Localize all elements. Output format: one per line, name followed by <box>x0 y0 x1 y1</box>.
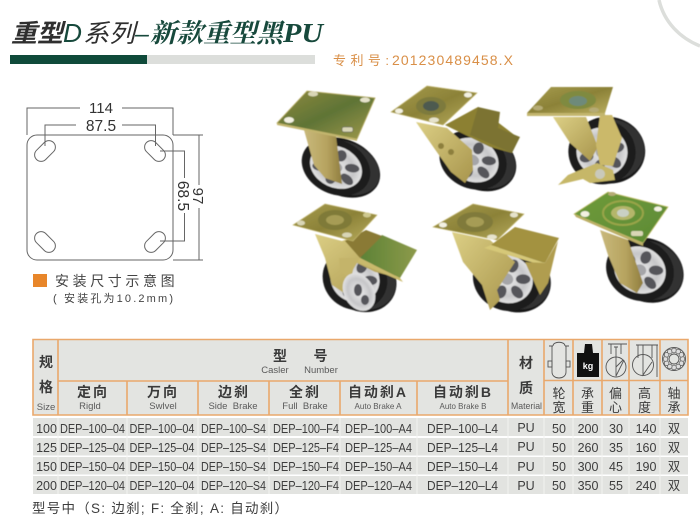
table row: 100: 30 <box>609 422 623 436</box>
header: material <box>511 355 542 412</box>
table row: 200: PU <box>517 479 535 493</box>
table row: 100: 50 <box>552 422 566 436</box>
mounting plate outline <box>27 135 173 260</box>
dimension 114: 114 <box>89 100 113 117</box>
title <box>11 18 325 48</box>
hole size note: ( 安装孔为10.2mm) <box>53 291 173 305</box>
table row: 100 <box>36 421 681 436</box>
table row: 200: DEP–120–S4 <box>201 479 266 493</box>
caster: full brake <box>293 204 417 326</box>
caster: auto brake <box>433 204 562 326</box>
header: auto brake A <box>348 384 408 411</box>
table row: 125: DEP–125–A4 <box>345 441 412 455</box>
table row: 150: DEP–150–L4 <box>427 460 498 474</box>
header: offset label: 偏 <box>609 386 622 401</box>
table row: 125: DEP–125–04 <box>130 441 195 455</box>
legend caption: 安装尺寸示意图 <box>55 273 178 289</box>
table row: 200 <box>36 479 681 493</box>
header: bearing label: 轴 <box>667 386 681 401</box>
header: full brake: Full Brake <box>282 401 328 412</box>
table row: 200: DEP–120–F4 <box>273 479 339 493</box>
header: offset label: 心 <box>609 400 622 415</box>
header: height label: 高 <box>638 386 651 401</box>
header: auto brake B: Auto Brake B <box>440 401 487 411</box>
icon: wheel width <box>548 342 570 378</box>
header: height label <box>638 386 651 415</box>
table row: 100: 140 <box>636 422 656 436</box>
icon: bearing <box>662 348 686 370</box>
header: rigid: Rigld <box>79 401 101 412</box>
table row: 125: 50 <box>552 441 566 455</box>
table row: 100: DEP–100–F4 <box>273 422 339 436</box>
icon: load weight <box>577 344 599 377</box>
patent number: 专利号: <box>333 53 389 68</box>
table row: 125: PU <box>517 440 535 454</box>
title progress bar <box>10 55 315 64</box>
header: swivel <box>147 384 179 412</box>
header: swivel: Swlvel <box>149 401 177 412</box>
header: material: 材 <box>519 355 533 371</box>
header: load label: 重 <box>581 400 594 415</box>
table row: 150: 150 <box>36 460 57 474</box>
caster: swivel with brake <box>391 86 526 204</box>
table row: 100: DEP–100–A4 <box>345 422 412 436</box>
header: bearing label: 承 <box>667 400 681 415</box>
table row: 150: DEP–150–F4 <box>273 460 339 474</box>
icon: offset <box>606 344 627 377</box>
table row: 200: DEP–120–L4 <box>427 479 498 493</box>
table row: 150: DEP–150–04 <box>60 460 125 474</box>
table row: 150 <box>36 460 681 474</box>
header: material: 质 <box>519 380 533 396</box>
table row: 100: DEP–100–04 <box>60 422 125 436</box>
table row: 150: 190 <box>636 460 656 474</box>
header: full brake <box>282 384 328 412</box>
header: model number: Casler <box>261 365 289 376</box>
icon: height <box>632 345 658 377</box>
caster photos <box>277 86 694 326</box>
table row: 150: DEP–150–A4 <box>345 460 412 474</box>
table row: 200: 55 <box>609 479 623 493</box>
table row: 125: 双 <box>668 441 681 455</box>
header: rigid <box>77 384 109 412</box>
table row: 150: 45 <box>609 460 623 474</box>
header: model number: 型 <box>273 348 287 364</box>
table row: 125: 125 <box>36 441 57 455</box>
table row: 125 <box>36 440 681 455</box>
header: wheel width label <box>552 386 566 415</box>
table row: 150: DEP–150–S4 <box>201 460 266 474</box>
decorative corner arc <box>659 0 700 46</box>
header: size: 格 <box>39 379 53 395</box>
title: 系列 <box>83 20 139 48</box>
table row: 150: PU <box>517 460 535 474</box>
table row: 125: DEP–125–L4 <box>427 441 498 455</box>
table row: 200: DEP–120–04 <box>130 479 195 493</box>
table row: 200: 350 <box>578 479 598 493</box>
legend swatch <box>33 274 47 287</box>
header: wheel width label: 轮 <box>552 386 566 401</box>
table row: 125: 160 <box>636 441 656 455</box>
header: auto brake A: 自动刹A <box>348 384 408 400</box>
table row: 100: 200 <box>578 422 598 436</box>
table row: 100: DEP–100–S4 <box>201 422 266 436</box>
table row: 125: DEP–125–S4 <box>201 441 266 455</box>
table row: 125: DEP–125–F4 <box>273 441 339 455</box>
patent number <box>333 52 514 68</box>
header: wheel width label: 宽 <box>552 400 566 415</box>
title: 新款重型黑 <box>150 19 285 48</box>
header: size: Size <box>37 402 55 413</box>
header: load label <box>581 386 594 415</box>
header: model number: Number <box>304 365 338 376</box>
footnote: 型号中（S: 边刹; F: 全刹; A: 自动刹） <box>32 500 288 516</box>
header: model number: 号 <box>314 348 328 364</box>
header: auto brake B <box>433 384 493 411</box>
table row: 150: DEP–150–04 <box>130 460 195 474</box>
specification table <box>33 339 688 494</box>
header: auto brake A: Auto Brake A <box>354 401 402 411</box>
header: model number <box>261 348 338 376</box>
table row: 150: 300 <box>578 460 598 474</box>
mounting dimension diagram <box>27 100 206 260</box>
title: – <box>134 20 150 48</box>
dimension lines <box>27 108 203 260</box>
table row: 100: DEP–100–L4 <box>427 422 498 436</box>
caster: swivel green <box>574 192 694 316</box>
header: side brake: 边刹 <box>218 384 250 400</box>
table row: 150: 双 <box>668 460 681 474</box>
header: size <box>37 354 55 413</box>
header: side brake <box>208 384 258 412</box>
table header background <box>33 339 688 415</box>
header: rigid: 定向 <box>77 384 109 400</box>
header: offset label <box>609 386 622 415</box>
icon: load weight: kg <box>583 361 593 371</box>
title: 重型 <box>11 20 66 48</box>
table header grid <box>33 340 688 415</box>
header: material: Material <box>511 401 542 412</box>
table row: 100: DEP–100–04 <box>130 422 195 436</box>
dimension 68.5: 68.5 <box>174 181 191 211</box>
header: swivel: 万向 <box>147 384 179 400</box>
header: auto brake B: 自动刹B <box>433 384 493 400</box>
table row: 200: 双 <box>668 479 681 493</box>
table row: 200: 200 <box>36 479 57 493</box>
title: D <box>63 18 82 48</box>
patent number: 201230489458.X <box>392 52 514 68</box>
table row: 125: 260 <box>578 441 598 455</box>
table row: 100: 双 <box>668 422 681 436</box>
table row: 200: DEP–120–A4 <box>345 479 412 493</box>
header: side brake: Side Brake <box>208 401 258 412</box>
dimension 87.5: 87.5 <box>86 118 116 135</box>
header: bearing label <box>667 386 681 415</box>
header: height label: 度 <box>638 400 651 415</box>
table row: 125: DEP–125–04 <box>60 441 125 455</box>
table row: 100: PU <box>517 421 535 435</box>
table row: 100: 100 <box>36 422 57 436</box>
table row: 125: 35 <box>609 441 623 455</box>
table data rows <box>33 418 688 494</box>
table row: 200: 50 <box>552 479 566 493</box>
header: load label: 承 <box>581 386 594 401</box>
caster: side brake <box>527 87 650 191</box>
header: full brake: 全刹 <box>289 384 321 400</box>
title: PU <box>282 18 325 48</box>
table row: 200: DEP–120–04 <box>60 479 125 493</box>
dimension 97: 97 <box>189 188 206 204</box>
caster: fixed <box>277 91 390 211</box>
table row: 200: 240 <box>636 479 656 493</box>
mounting slots <box>32 138 168 255</box>
table row: 150: 50 <box>552 460 566 474</box>
header: size: 规 <box>39 354 53 370</box>
